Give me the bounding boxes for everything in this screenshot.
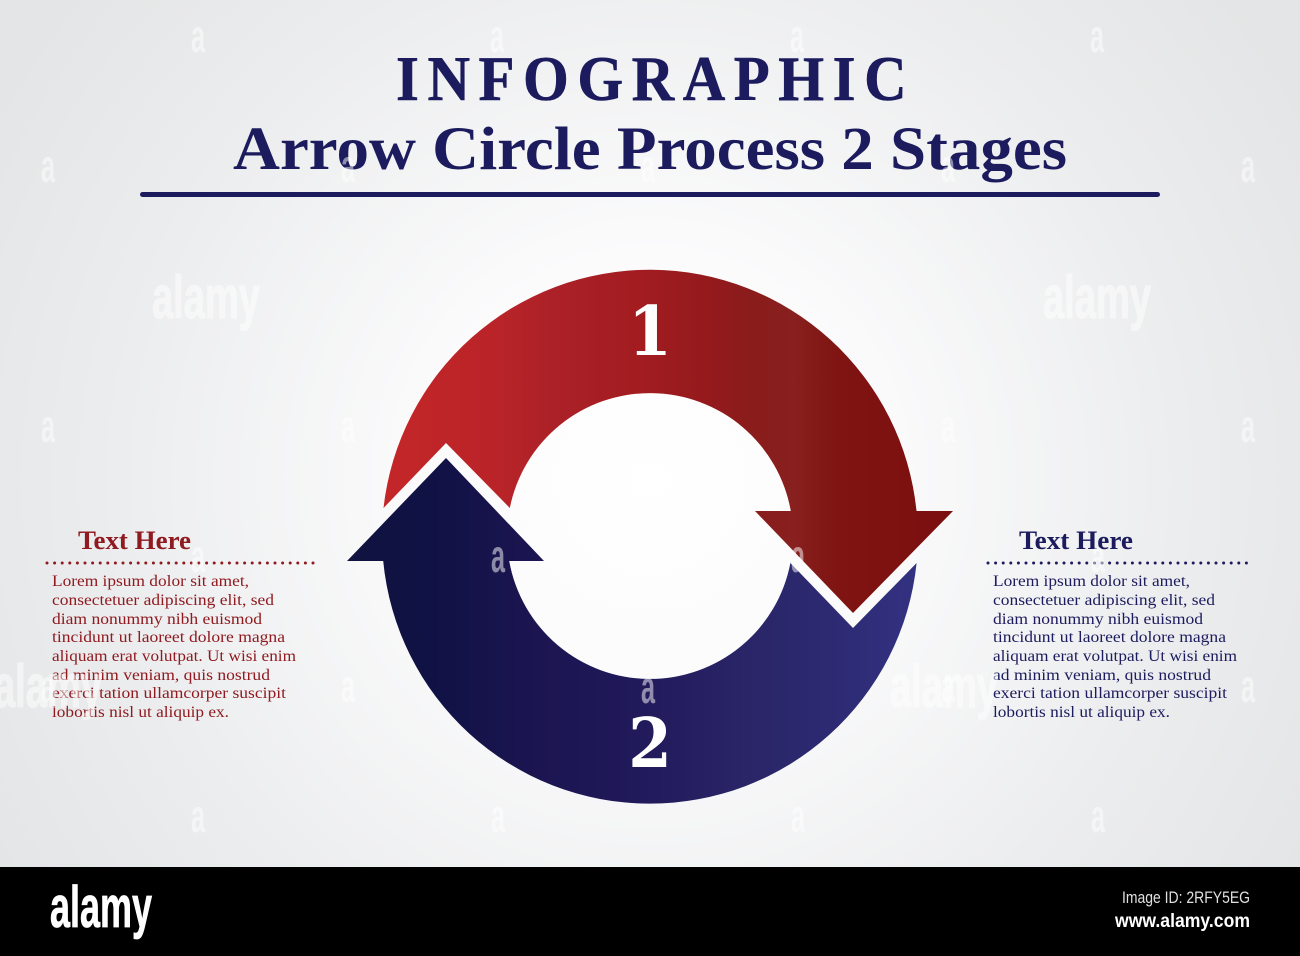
- left dotted rule: [47, 562, 313, 564]
- website: www.alamy.com: [1114, 911, 1250, 932]
- watermark pattern: a: [791, 790, 805, 842]
- right paragraph: diam nonummy nibh euismod: [993, 611, 1203, 628]
- watermark pattern: a: [41, 660, 55, 712]
- watermark pattern: a: [941, 660, 955, 712]
- watermark pattern: a: [941, 400, 955, 452]
- right paragraph: consectetuer adipiscing elit, sed: [993, 592, 1215, 609]
- arrow 2: blue: [347, 458, 917, 804]
- watermark pattern: a: [490, 10, 504, 62]
- watermark pattern: a: [41, 400, 55, 452]
- left paragraph: consectetuer adipiscing elit, sed: [52, 592, 274, 609]
- watermark pattern: a: [1090, 10, 1104, 62]
- right paragraph: ad minim veniam, quis nostrud: [993, 667, 1211, 684]
- watermark pattern: a: [790, 10, 804, 62]
- title underline: [140, 192, 1160, 197]
- left paragraph: ad minim veniam, quis nostrud: [52, 667, 270, 684]
- right paragraph: Lorem ipsum dolor sit amet,: [993, 573, 1190, 590]
- left paragraph: diam nonummy nibh euismod: [52, 611, 262, 628]
- watermark pattern: a: [1091, 790, 1105, 842]
- watermark pattern: a: [1241, 140, 1255, 192]
- right paragraph: exerci tation ullamcorper suscipit: [993, 685, 1228, 702]
- arrow 1: red: [384, 270, 953, 613]
- footer logo: alamy: [50, 875, 152, 940]
- watermark pattern: a: [41, 140, 55, 192]
- right paragraph: lobortis nisl ut aliquip ex.: [993, 704, 1170, 721]
- watermark pattern: a: [341, 400, 355, 452]
- text block: left: [47, 526, 313, 721]
- watermark pattern: a: [641, 661, 655, 713]
- title: INFOGRAPHIC: [396, 44, 907, 115]
- watermark pattern: a: [641, 140, 655, 192]
- watermark pattern: a: [1241, 400, 1255, 452]
- watermark pattern: a: [491, 790, 505, 842]
- watermark pattern: a: [791, 530, 805, 582]
- watermark pattern: a: [341, 660, 355, 712]
- watermark pattern: a: [341, 140, 355, 192]
- left paragraph: tincidunt ut laoreet dolore magna: [52, 629, 285, 646]
- watermark pattern: a: [191, 10, 205, 62]
- right dotted rule: [988, 562, 1254, 564]
- watermark pattern: alamy: [890, 653, 998, 720]
- watermark pattern: alamy: [1043, 264, 1151, 331]
- left paragraph: aliquam erat volutpat. Ut wisi enim: [52, 648, 296, 665]
- left paragraph: exerci tation ullamcorper suscipit: [52, 685, 287, 702]
- watermark pattern: a: [191, 530, 205, 582]
- watermark pattern: a: [191, 790, 205, 842]
- watermark pattern: a: [941, 140, 955, 192]
- number 1: 1: [628, 293, 672, 372]
- image id: Image ID: 2RFY5EG: [1122, 888, 1250, 907]
- left heading: Text Here: [78, 526, 191, 555]
- number 2: 2: [628, 705, 672, 784]
- right paragraph: [993, 573, 1237, 721]
- watermark pattern: a: [1241, 660, 1255, 712]
- text block: right: [988, 526, 1254, 721]
- right paragraph: aliquam erat volutpat. Ut wisi enim: [993, 648, 1237, 665]
- right paragraph: tincidunt ut laoreet dolore magna: [993, 629, 1226, 646]
- watermark pattern: a: [1091, 530, 1105, 582]
- watermark pattern: alamy: [152, 264, 260, 331]
- left paragraph: Lorem ipsum dolor sit amet,: [52, 573, 249, 590]
- footer bar: [0, 867, 1300, 956]
- left paragraph: [52, 573, 296, 721]
- title: Arrow Circle Process 2 Stages: [233, 116, 1067, 183]
- left paragraph: lobortis nisl ut aliquip ex.: [52, 704, 229, 721]
- right heading: Text Here: [1019, 526, 1133, 555]
- title: [233, 44, 1067, 183]
- watermark pattern: a: [491, 530, 505, 582]
